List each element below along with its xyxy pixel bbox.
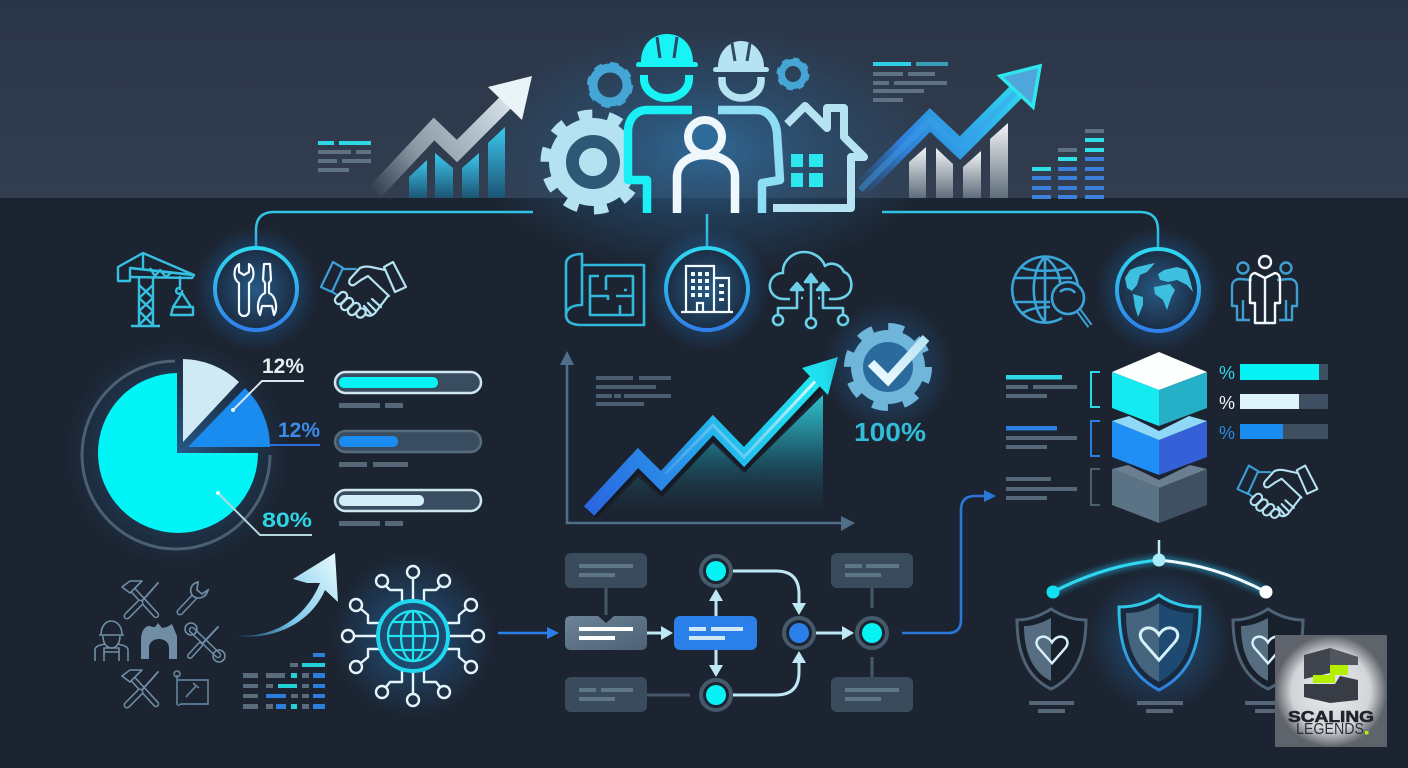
100% label: 100% <box>854 417 926 447</box>
percent bars: % <box>1219 363 1235 383</box>
blue slice <box>188 388 270 447</box>
globe <box>378 601 448 671</box>
circle: wrench and screwdriver <box>194 227 318 351</box>
label 12% white: 12% <box>262 355 304 378</box>
house <box>773 106 864 208</box>
bottom left box <box>565 677 690 712</box>
logo badge <box>1275 635 1387 747</box>
circle: building <box>645 227 769 351</box>
flow arrows <box>647 571 854 695</box>
handshake icon right <box>1238 466 1317 519</box>
centre shield <box>1087 568 1231 712</box>
right shield <box>1233 609 1303 689</box>
circle: world globe <box>1096 228 1220 352</box>
big gear <box>545 114 641 210</box>
wrench <box>180 582 208 612</box>
left header growth chart <box>318 76 532 198</box>
layered stack <box>1006 352 1328 523</box>
cube blue <box>1112 416 1207 475</box>
curved arrow <box>232 553 338 637</box>
header text lines left <box>318 141 371 172</box>
process flow <box>498 490 996 712</box>
bars right <box>909 123 1008 198</box>
outer ring <box>82 361 270 549</box>
pie glow <box>65 341 289 565</box>
wrench and screwdriver crossed <box>185 623 225 662</box>
left hub: tools <box>118 227 406 351</box>
shield caption lines <box>1029 701 1290 713</box>
shields <box>1017 540 1303 713</box>
house windows <box>791 154 823 187</box>
central team icon group <box>545 34 864 213</box>
progress bar 3 <box>335 490 481 526</box>
left shield <box>1017 609 1086 689</box>
top left box <box>565 553 647 615</box>
hammer and screwdriver bottom <box>122 670 158 705</box>
header text lines right <box>873 62 948 102</box>
chart axes <box>560 351 855 531</box>
people icon <box>1232 256 1297 323</box>
centre hub: building <box>566 227 851 351</box>
bottom left tool icons <box>95 581 225 705</box>
blue input arrow <box>498 627 559 639</box>
cube cyan <box>1112 352 1207 426</box>
blueprint icon <box>566 254 644 325</box>
chart text lines <box>596 376 671 406</box>
small gear right <box>779 60 807 88</box>
worker left <box>628 34 698 213</box>
hammer and screwdriver top <box>122 581 158 616</box>
circuit traces <box>342 566 484 706</box>
worker right <box>713 41 780 213</box>
globe search icon <box>1012 257 1090 326</box>
area under line <box>607 395 823 510</box>
trend line <box>589 357 838 514</box>
logo badge: LEGENDS <box>1296 721 1364 738</box>
progress bar 2 <box>335 431 481 467</box>
growth chart centre <box>560 301 954 531</box>
percent bars: % <box>1219 393 1235 413</box>
node circles <box>701 556 887 710</box>
mini segmented table <box>243 653 325 709</box>
percent bars: % <box>1219 423 1235 443</box>
stacked segment bars <box>1032 129 1104 199</box>
pie chart <box>65 341 320 565</box>
percent bars <box>1219 363 1328 443</box>
blue process box <box>674 616 757 650</box>
blueprint small <box>174 671 208 705</box>
arrow right <box>860 66 1040 190</box>
pale slice <box>183 359 239 442</box>
logo text: SCALING <box>1288 709 1374 726</box>
arrow left <box>374 76 532 193</box>
cloud network icon <box>770 252 851 328</box>
logo mark <box>1304 648 1358 703</box>
cube grey <box>1112 465 1207 523</box>
label 12% white <box>231 355 304 412</box>
right top box <box>831 553 913 608</box>
bars left <box>409 127 505 198</box>
label 12% blue: 12% <box>278 419 320 442</box>
connector lines <box>256 212 1158 249</box>
stack text lines <box>1006 375 1077 500</box>
middle left box <box>565 616 647 650</box>
label 80% <box>216 491 312 535</box>
right header growth chart <box>860 62 1104 199</box>
right bottom box <box>831 657 913 712</box>
gear arch <box>141 623 177 659</box>
crane icon <box>118 253 194 326</box>
blue output connector <box>902 490 996 633</box>
arc connector <box>1046 540 1272 598</box>
central person <box>677 120 735 213</box>
handshake icon <box>321 262 406 319</box>
progress bars <box>335 372 481 526</box>
progress bar 1 <box>335 372 481 408</box>
brackets <box>1091 372 1100 505</box>
network globe <box>331 554 495 718</box>
cyan slice 80% <box>98 373 258 533</box>
gear with check <box>822 301 954 433</box>
label 80%: 80% <box>262 509 312 532</box>
small gear left <box>590 65 630 105</box>
right hub: global <box>1012 228 1297 352</box>
worker outline <box>95 621 128 661</box>
